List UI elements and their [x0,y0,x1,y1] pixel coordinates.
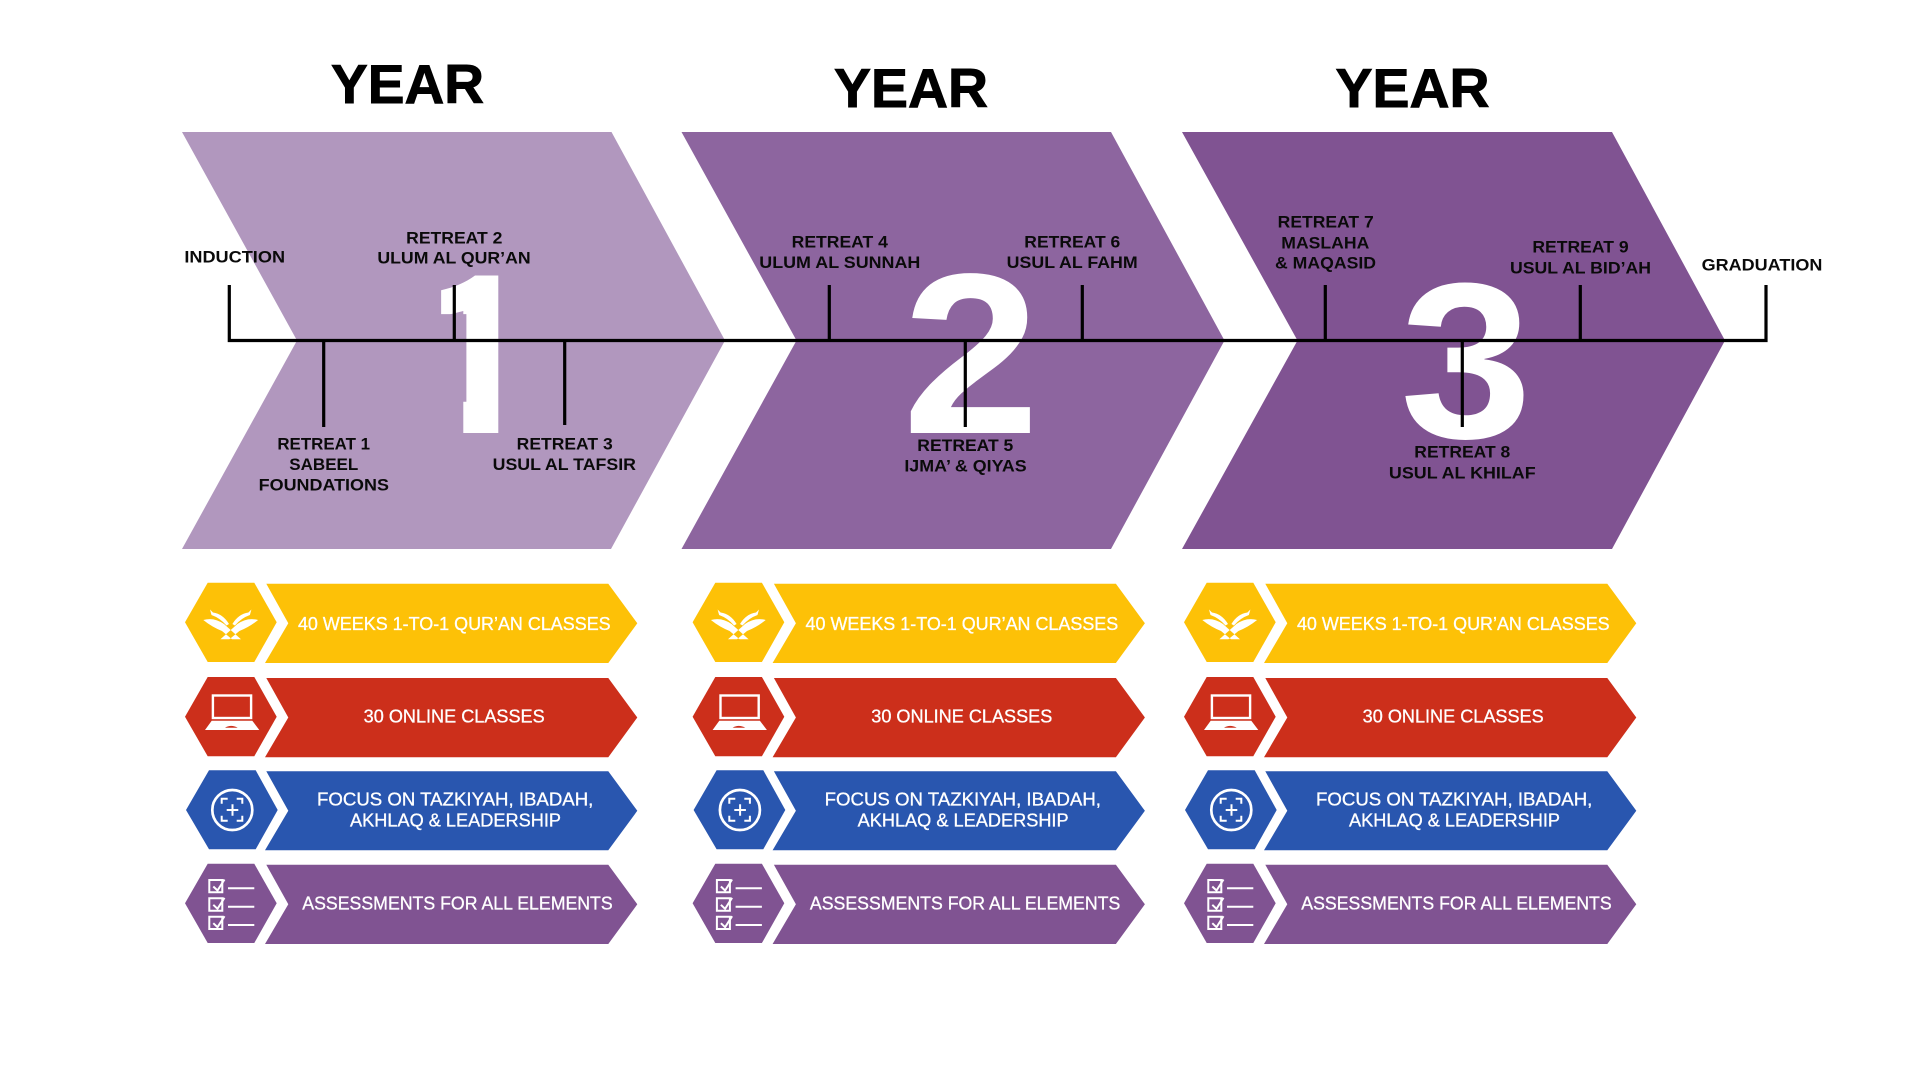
label: retreat 3 [493,434,636,474]
label: retreat 7 [1275,213,1376,273]
label: retreat 6: USUL AL FAHM [1007,253,1138,272]
label: graduation: GRADUATION [1702,256,1822,275]
label: retreat 6 [1007,233,1138,272]
label: retreat 7: RETREAT 7 [1278,213,1374,232]
panel: year 2 chevron [682,132,1224,549]
bar: assessments [1264,865,1636,944]
text: online classes: 30 ONLINE CLASSES [1363,707,1544,727]
timeline with ticks [229,285,1766,427]
panel: year 1 chevron [182,132,725,549]
text: focus [317,790,593,830]
text: quran classes: 40 WEEKS 1-TO-1 QUR’AN CLASSES [1297,614,1610,634]
label: retreat 9: USUL AL BID’AH [1510,258,1651,277]
numeral 3: 3 [1400,237,1532,485]
bar: focus [773,771,1145,850]
icon: open book on yellow hexagon [185,583,277,662]
label: induction: INDUCTION [184,248,285,267]
text: focus [1316,790,1592,830]
text: focus: AKHLAQ & LEADERSHIP [858,810,1069,830]
bar: assessments [265,865,637,944]
panel: year 3 chevron [1182,132,1725,549]
icon: laptop on red hexagon [185,677,277,756]
panel: year 1 features [185,583,637,944]
label: retreat 3: USUL AL TAFSIR [493,455,636,474]
text: focus: FOCUS ON TAZKIYAH, IBADAH, [317,790,593,810]
bar: quran classes [265,584,637,663]
label: retreat 1: SABEEL [289,455,358,474]
icon: focus target on blue hexagon [186,770,278,849]
bar: focus [1264,771,1636,850]
numeral 1: 1 [423,181,535,495]
icon: checklist on purple hexagon [693,864,784,943]
panel: year 3 features [1184,583,1636,944]
text: quran classes: 40 WEEKS 1-TO-1 QUR’AN CLASSES [298,614,611,634]
label: retreat 4 [759,233,920,272]
label: retreat 7: MASLAHA [1281,233,1369,252]
text: online classes: 30 ONLINE CLASSES [364,707,545,727]
text: focus: AKHLAQ & LEADERSHIP [350,810,561,830]
text: focus: FOCUS ON TAZKIYAH, IBADAH, [1316,790,1592,810]
icon: laptop on red hexagon [1184,677,1276,756]
label: retreat 5 [904,436,1027,476]
label: retreat 5: RETREAT 5 [917,436,1013,455]
label: retreat 3: RETREAT 3 [517,434,613,453]
text: assessments: ASSESSMENTS FOR ALL ELEMENTS [1301,894,1612,914]
bar: quran classes [773,584,1145,663]
label: retreat 7: & MAQASID [1275,254,1376,273]
bar: focus [265,771,637,850]
label: retreat 9: RETREAT 9 [1532,238,1629,257]
text: assessments: ASSESSMENTS FOR ALL ELEMENTS [302,894,613,914]
label: retreat 2: RETREAT 2 [406,228,502,247]
text: focus [825,790,1101,830]
text: online classes: 30 ONLINE CLASSES [871,707,1052,727]
numeral 2: 2 [902,225,1040,482]
label: retreat 1: FOUNDATIONS [259,475,389,494]
label: retreat 5: IJMA’ & QIYAS [904,457,1027,476]
label: retreat 8: USUL AL KHILAF [1389,463,1536,482]
text: focus: FOCUS ON TAZKIYAH, IBADAH, [825,790,1101,810]
label: retreat 6: RETREAT 6 [1024,233,1120,252]
panel: year 2 features [693,583,1145,944]
icon: focus target on blue hexagon [694,770,785,849]
label: retreat 1: RETREAT 1 [277,434,370,453]
bar: online classes [265,678,637,757]
icon: laptop on red hexagon [693,677,784,756]
label: retreat 2: ULUM AL QUR’AN [377,248,531,267]
label: retreat 2 [377,228,531,267]
label: retreat 9 [1510,238,1651,277]
icon: focus target on blue hexagon [1185,770,1277,849]
heading: year 2: YEAR [834,57,988,119]
heading: year 3: YEAR [1336,57,1490,119]
heading: year 1: YEAR [331,53,484,115]
icon: checklist on purple hexagon [1184,864,1276,943]
label: retreat 1 [259,434,389,494]
icon: open book on yellow hexagon [693,583,784,662]
label: retreat 8: RETREAT 8 [1414,443,1510,462]
label: retreat 4: ULUM AL SUNNAH [759,253,920,272]
text: quran classes: 40 WEEKS 1-TO-1 QUR’AN CLASSES [806,614,1118,634]
bar: assessments [773,865,1145,944]
infographic canvas [182,64,1822,944]
text: assessments: ASSESSMENTS FOR ALL ELEMENTS [810,894,1120,914]
label: retreat 4: RETREAT 4 [792,233,889,252]
bar: online classes [773,678,1145,757]
text: focus: AKHLAQ & LEADERSHIP [1349,810,1560,830]
bar: quran classes [1264,584,1636,663]
bar: online classes [1264,678,1636,757]
icon: checklist on purple hexagon [185,864,277,943]
icon: open book on yellow hexagon [1184,583,1276,662]
label: retreat 8 [1389,443,1536,482]
